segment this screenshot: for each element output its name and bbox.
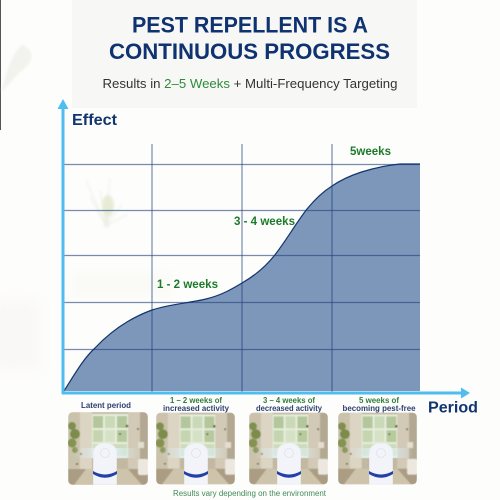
stage 4: 5 weeks: becoming pest-free [342, 404, 416, 413]
stage 3: 3-4 weeks: 3 – 4 weeks of [263, 396, 315, 405]
stage 1: latent period [68, 401, 148, 485]
grid lines [64, 144, 420, 392]
stage 2: 1-2 weeks [156, 396, 235, 485]
label: 1 - 2 weeks: 1 - 2 weeks [157, 277, 218, 291]
stage 3: 3-4 weeks [249, 396, 328, 485]
title: PEST REPELLENT IS A [132, 12, 368, 38]
curve line [64, 164, 420, 391]
label: 5weeks: 5weeks [350, 144, 391, 158]
stage 2: 1-2 weeks: increased activity [163, 404, 230, 413]
title: CONTINUOUS PROGRESS [109, 39, 390, 64]
axis label: Period: Period [428, 400, 478, 416]
stage 4: 5 weeks: 5 weeks of [359, 396, 399, 405]
y axis arrow [58, 99, 68, 394]
footnote: Results vary depending on the environment [173, 489, 327, 498]
stage 3: 3-4 weeks: decreased activity [256, 404, 323, 413]
subtitle: Results in 2–5 Weeks + Multi-Frequency Targeting [102, 76, 398, 91]
area under curve [64, 164, 420, 391]
stage 2: 1-2 weeks: 1 – 2 weeks of [170, 396, 222, 405]
chart: effect curve [64, 144, 420, 392]
title [109, 12, 390, 64]
decorative plant in chart [86, 178, 128, 227]
axis label: Effect: Effect [72, 112, 118, 129]
label: 3 - 4 weeks: 3 - 4 weeks [234, 214, 295, 228]
x axis arrow [62, 388, 470, 398]
stage 1: latent period: Latent period [81, 401, 131, 410]
stage 4: 5 weeks [338, 396, 417, 485]
